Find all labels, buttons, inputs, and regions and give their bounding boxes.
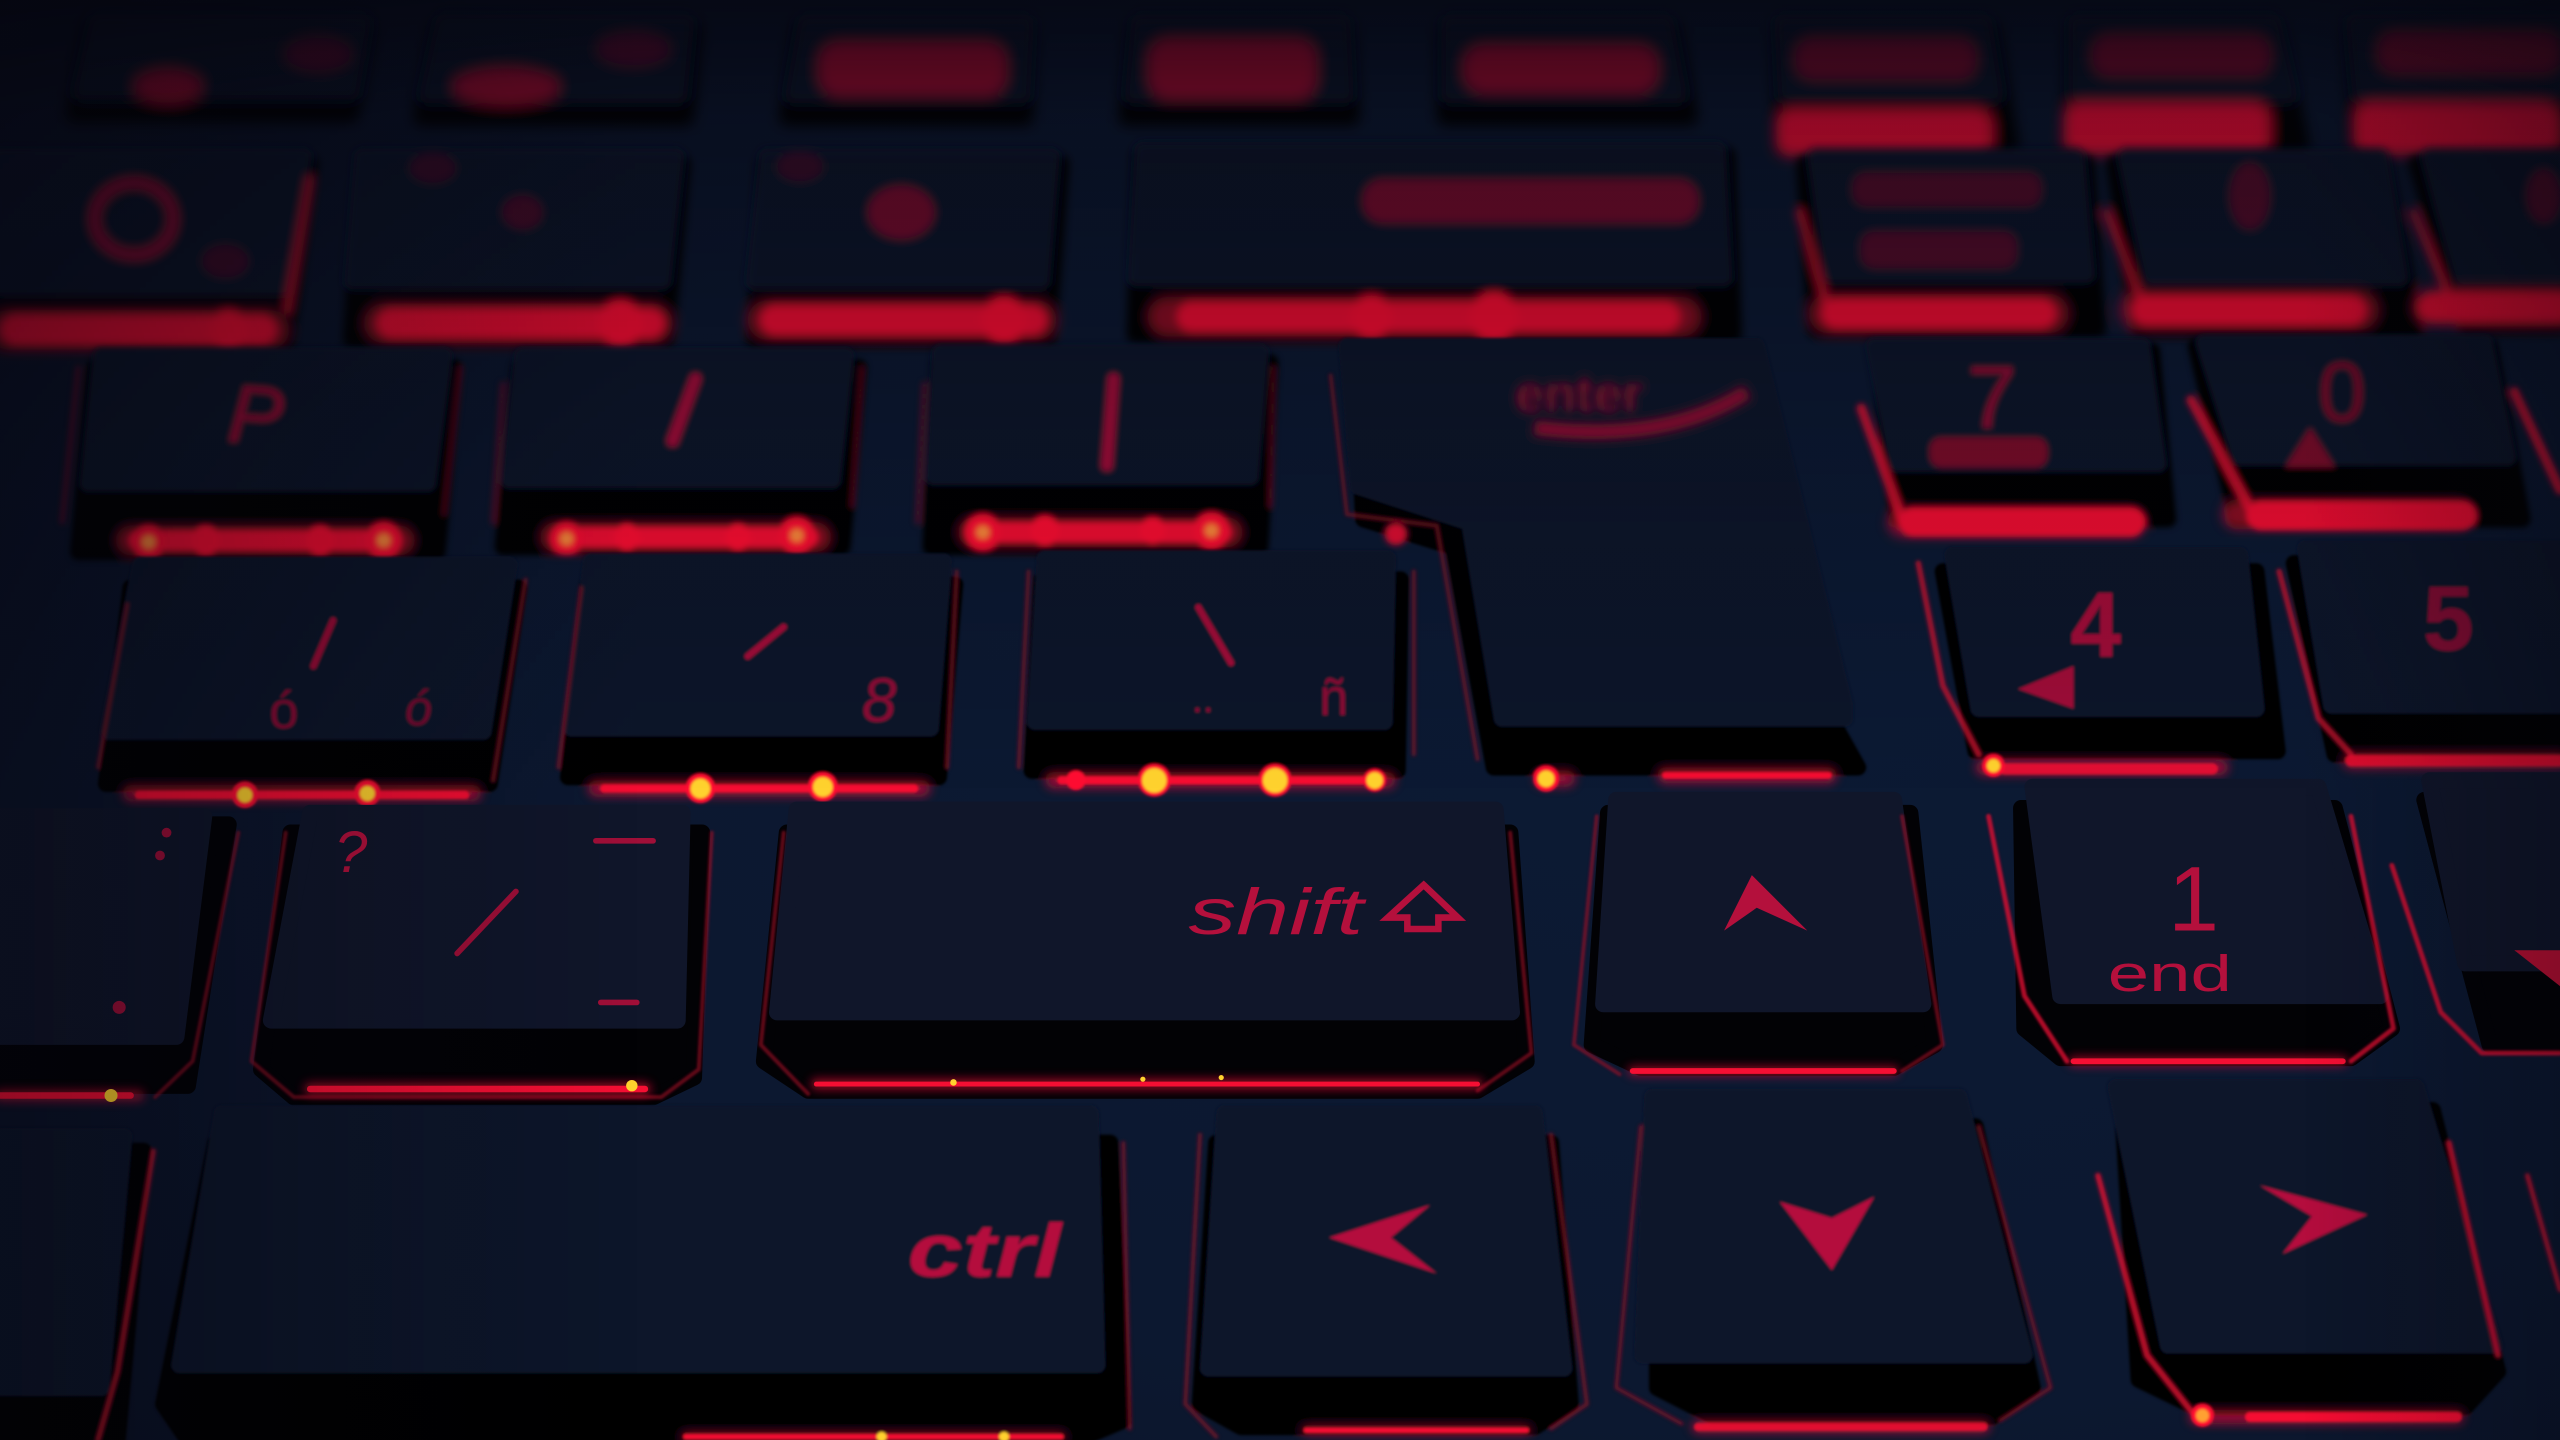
key row 6: bottom row bbox=[0, 1087, 2560, 1440]
key: right arrow bbox=[2098, 1087, 2560, 1427]
icon: right arrow bbox=[2260, 1185, 2367, 1254]
glow strips of row 3 bbox=[131, 514, 2457, 540]
icon: shift arrow bbox=[1388, 885, 1458, 929]
key row 4: home row keys: ñ bbox=[1319, 669, 1348, 727]
key row 4: home row keys: ó bbox=[269, 682, 298, 740]
key: slash bbox=[251, 813, 712, 1097]
key: slash: ? bbox=[335, 820, 368, 885]
glow strips of row 4 bbox=[131, 761, 2560, 793]
key: left arrow bbox=[1185, 1113, 1587, 1437]
shift label: shift bbox=[1189, 875, 1367, 948]
enter key: enter bbox=[1515, 365, 1643, 423]
key: numeric 1 end: end bbox=[2108, 945, 2232, 1002]
legends of row 4 bbox=[313, 607, 1231, 666]
icon: left arrow bbox=[1329, 1205, 1437, 1273]
key: numeric 1 end: 1 bbox=[2168, 849, 2219, 951]
key row 3: P row keys and enter: 0 bbox=[2318, 344, 2366, 439]
key row 4: home row keys: 5 bbox=[2423, 568, 2474, 670]
key: up arrow bbox=[1574, 800, 1943, 1074]
glow strips of row 2 bbox=[8, 292, 2560, 349]
key row 2: blurred number-row keys bbox=[0, 150, 2560, 349]
key: down arrow bbox=[1616, 1097, 2051, 1427]
key row 4: home row keys: 4 bbox=[2070, 574, 2121, 676]
legends of row 3: P bbox=[225, 368, 286, 463]
key: numeric 2 bbox=[2392, 780, 2560, 1053]
key: numeric 1 end bbox=[1989, 787, 2393, 1061]
legends of row 2 bbox=[95, 152, 2560, 278]
key: question mark bbox=[0, 816, 238, 1102]
enter key bbox=[1331, 346, 1858, 792]
key: shift bbox=[761, 810, 1531, 1094]
key: ctrl: ctrl bbox=[908, 1209, 1064, 1293]
key row 4: home row keys: .. bbox=[1192, 678, 1214, 721]
key row 4: home row keys bbox=[98, 549, 2560, 808]
key row 1: far top row bbox=[73, 23, 2560, 157]
key row 3: P row keys and enter: 7 bbox=[1967, 348, 2016, 447]
key row 5: shift row bbox=[0, 780, 2560, 1102]
key row 4: home row keys: 8 bbox=[862, 667, 897, 736]
icon: up arrow bbox=[1724, 875, 1807, 931]
key: left fragment bbox=[0, 1136, 153, 1440]
key: ctrl bbox=[163, 1113, 1130, 1440]
icon: down arrow bbox=[1780, 1197, 1874, 1270]
key row 3: P row keys and enter bbox=[62, 343, 2560, 558]
enter key glow bbox=[1543, 776, 1829, 779]
key row 4: home row keys: ó bbox=[405, 682, 432, 736]
